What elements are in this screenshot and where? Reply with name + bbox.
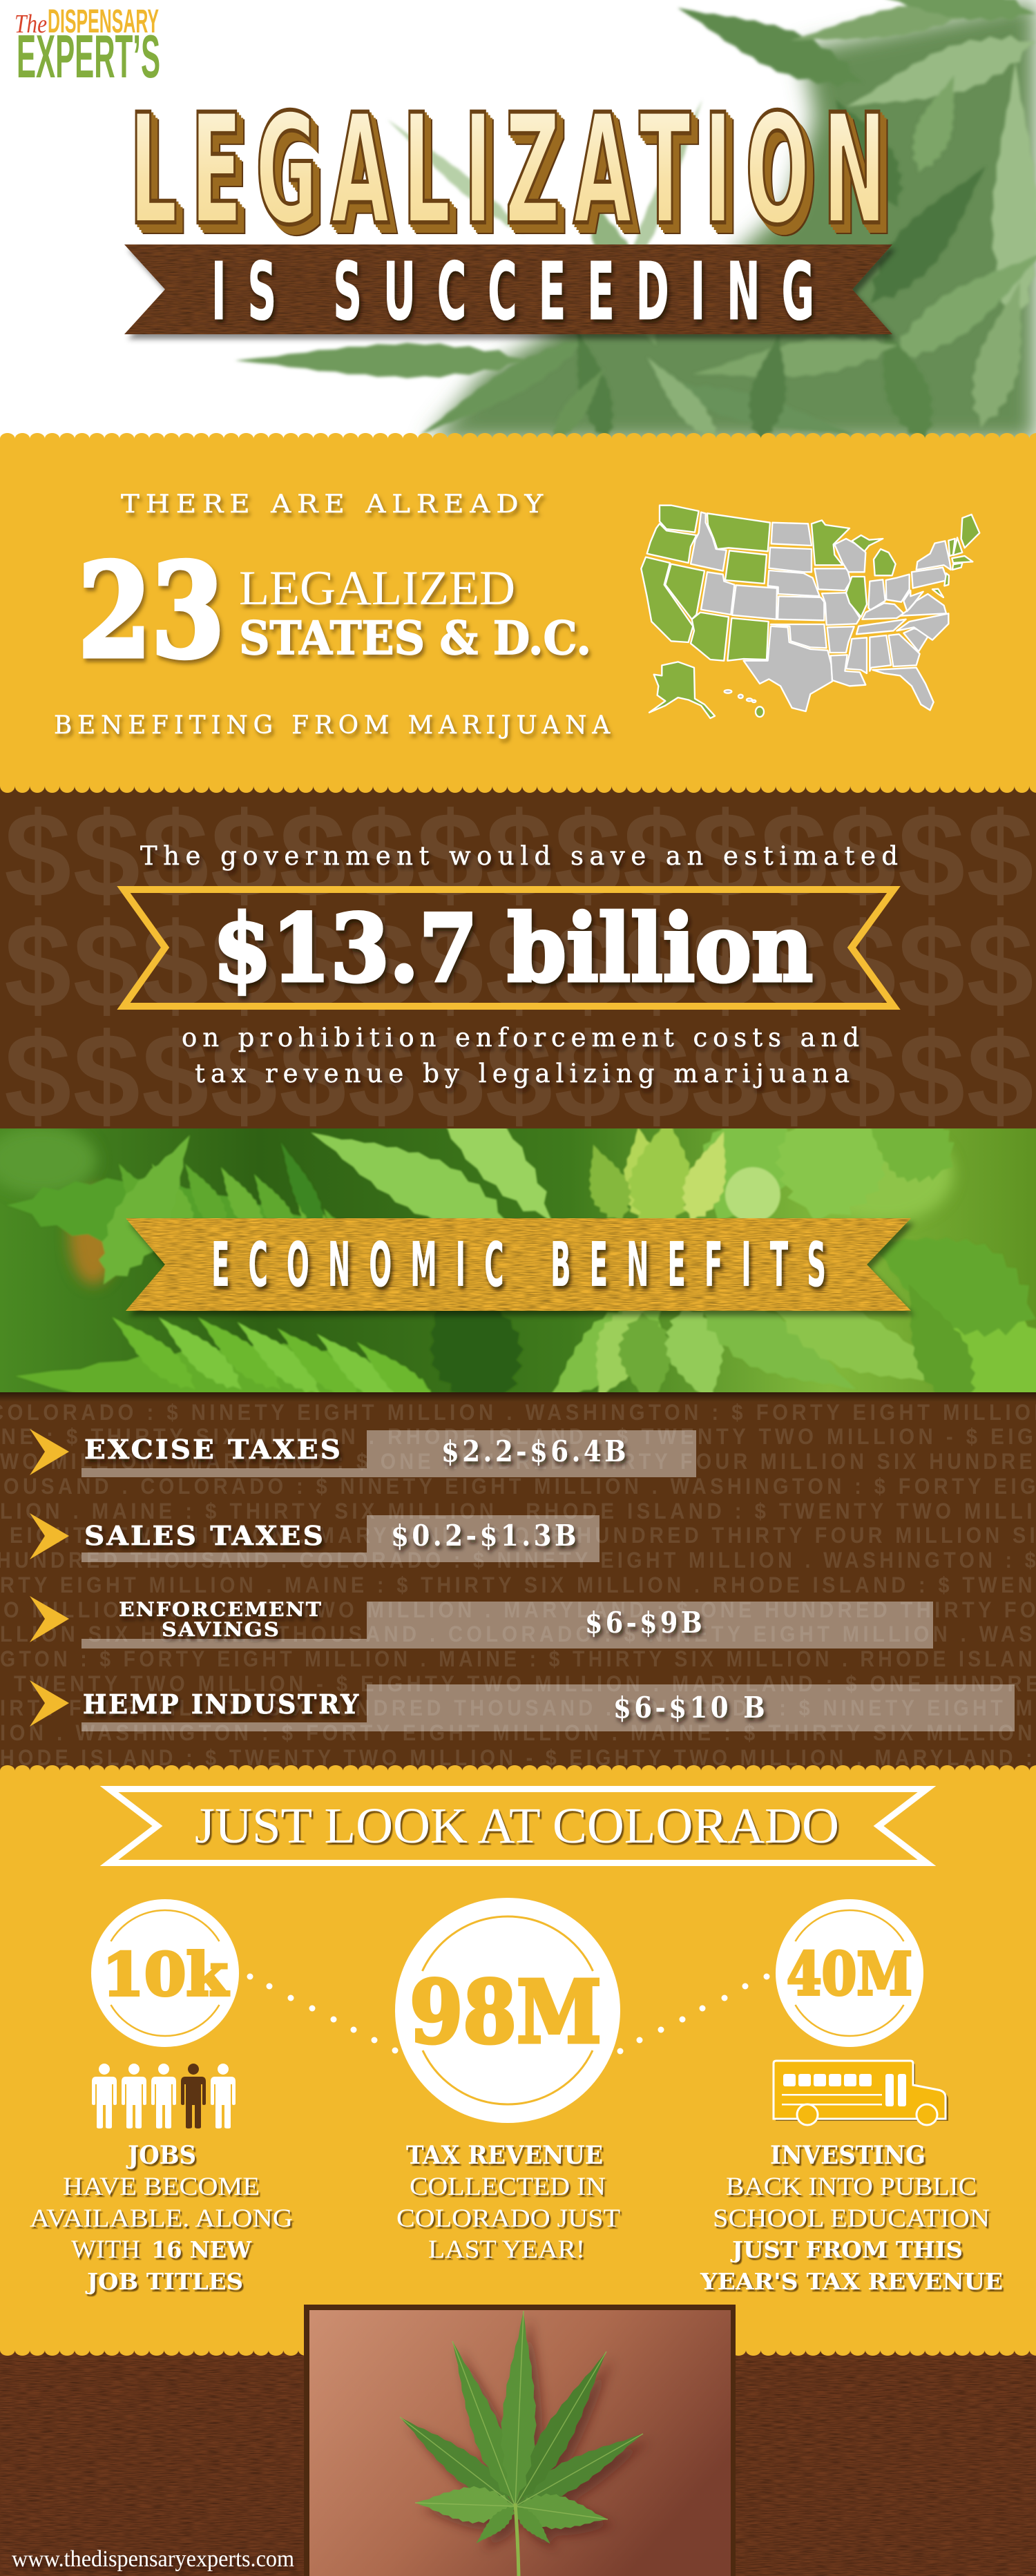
jobs copy [30, 2173, 293, 2295]
framed photo: leaf on terracotta [304, 2305, 736, 2576]
text: states and dc: STATES & D.C. [239, 611, 591, 665]
investing copy: BACK INTO PUBLIC [726, 2173, 977, 2201]
value: $6-$9B [585, 1606, 705, 1640]
stat circle: 40M [776, 1899, 923, 2047]
stat: 23: 23 [78, 535, 224, 687]
bar [81, 1515, 599, 1562]
logo: The: The [15, 10, 47, 39]
dotted connector: right [617, 1974, 769, 2054]
investing copy [700, 2173, 1003, 2295]
jobs copy: WITH [71, 2236, 140, 2264]
ribbon: economic benefits [126, 1218, 911, 1311]
jobs heading: JOBS [126, 2141, 196, 2170]
stat value: 40M [787, 1940, 912, 2009]
investing heading: INVESTING [770, 2141, 925, 2170]
map: united states [641, 506, 979, 718]
panel: colorado background [0, 1765, 1036, 2350]
text: EXPERT’S [17, 22, 160, 90]
arrow [30, 1680, 69, 1727]
text: legalized: LEGALIZED [239, 561, 515, 615]
icon: school bus [774, 2061, 948, 2125]
row: hemp industry [30, 1680, 1015, 1731]
arrow [30, 1513, 69, 1559]
value: $2.2-$6.4B [441, 1434, 629, 1468]
panel: footer wood band [0, 2350, 1036, 2576]
tax revenue copy: COLORADO JUST [396, 2204, 620, 2233]
text block: jobs [30, 2141, 293, 2295]
jobs copy: JOB TITLES [85, 2268, 243, 2295]
photo: cannabis leaves [0, 1015, 1036, 1472]
ribbon outline: savings [124, 890, 894, 1006]
stat: 13.7 billion: $13.7 billion [213, 894, 813, 1003]
label line two: SAVINGS [162, 1618, 280, 1641]
footer url: www.thedispensaryexperts.com [12, 2546, 294, 2572]
text: there are already: THERE ARE ALREADY [121, 490, 549, 519]
tax revenue copy [396, 2173, 620, 2264]
jobs copy: HAVE BECOME [63, 2173, 260, 2201]
tax revenue copy: LAST YEAR! [428, 2236, 585, 2264]
label: SALES TAXES [84, 1520, 325, 1551]
row: sales taxes [30, 1513, 599, 1562]
tax revenue heading: TAX REVENUE [406, 2141, 603, 2170]
row: excise taxes [30, 1429, 696, 1477]
stat value: 10k [102, 1941, 229, 2010]
logo [15, 3, 160, 90]
stat circle: 98M [395, 1898, 620, 2123]
label: HEMP INDUSTRY [83, 1689, 361, 1720]
jobs copy: AVAILABLE. ALONG [30, 2204, 293, 2233]
text: government would save: The government would save an estimated [140, 841, 898, 871]
arrow [30, 1596, 69, 1642]
pattern: revenue text background [0, 1400, 1036, 1770]
icon: people [92, 2064, 236, 2128]
panel: brown savings background [0, 786, 1036, 1128]
logo: Dispensary: DISPENSARY [48, 3, 159, 40]
row: enforcement savings [30, 1596, 933, 1649]
ribbon outline: just look at colorado [109, 1789, 927, 1863]
stat circle: 10k [91, 1899, 239, 2047]
bar [81, 1684, 1015, 1731]
text: prohibition line one: on prohibition enforcement costs and [182, 1023, 859, 1052]
value: $6-$10 B [613, 1691, 768, 1724]
panel: economic benefits background [0, 1392, 1036, 1771]
tax revenue copy: COLLECTED IN [410, 2173, 606, 2201]
investing copy: JUST FROM THIS [730, 2236, 963, 2263]
panel: blurred cannabis plant background [235, 0, 1036, 450]
text block: investing [700, 2141, 1003, 2295]
heading: just look at colorado: JUST LOOK AT COLORADO [195, 1798, 839, 1854]
arrow [30, 1429, 69, 1475]
panel: states background [0, 433, 1036, 786]
bar [81, 1430, 696, 1477]
investing copy: YEAR'S TAX REVENUE [700, 2268, 1003, 2295]
text: prohibition line two: tax revenue by legalizing marijuana [195, 1059, 850, 1088]
jobs copy: 16 NEW [151, 2236, 252, 2263]
investing copy: SCHOOL EDUCATION [713, 2204, 990, 2233]
value: $0.2-$1.3B [391, 1519, 579, 1553]
label line one: ENFORCEMENT [119, 1598, 323, 1621]
text block: tax revenue [396, 2141, 620, 2264]
pattern: dollar signs [4, 788, 1036, 1144]
dotted connector: left [247, 1974, 398, 2054]
bar [81, 1602, 933, 1649]
stat value: 98M [410, 1962, 602, 2063]
ribbon: is succeeding [124, 244, 892, 338]
icon: cannabis leaf [391, 2310, 651, 2576]
label: EXCISE TAXES [84, 1434, 343, 1465]
text: benefiting from marijuana: BENEFITING FROM MARIJUANA [54, 711, 615, 740]
